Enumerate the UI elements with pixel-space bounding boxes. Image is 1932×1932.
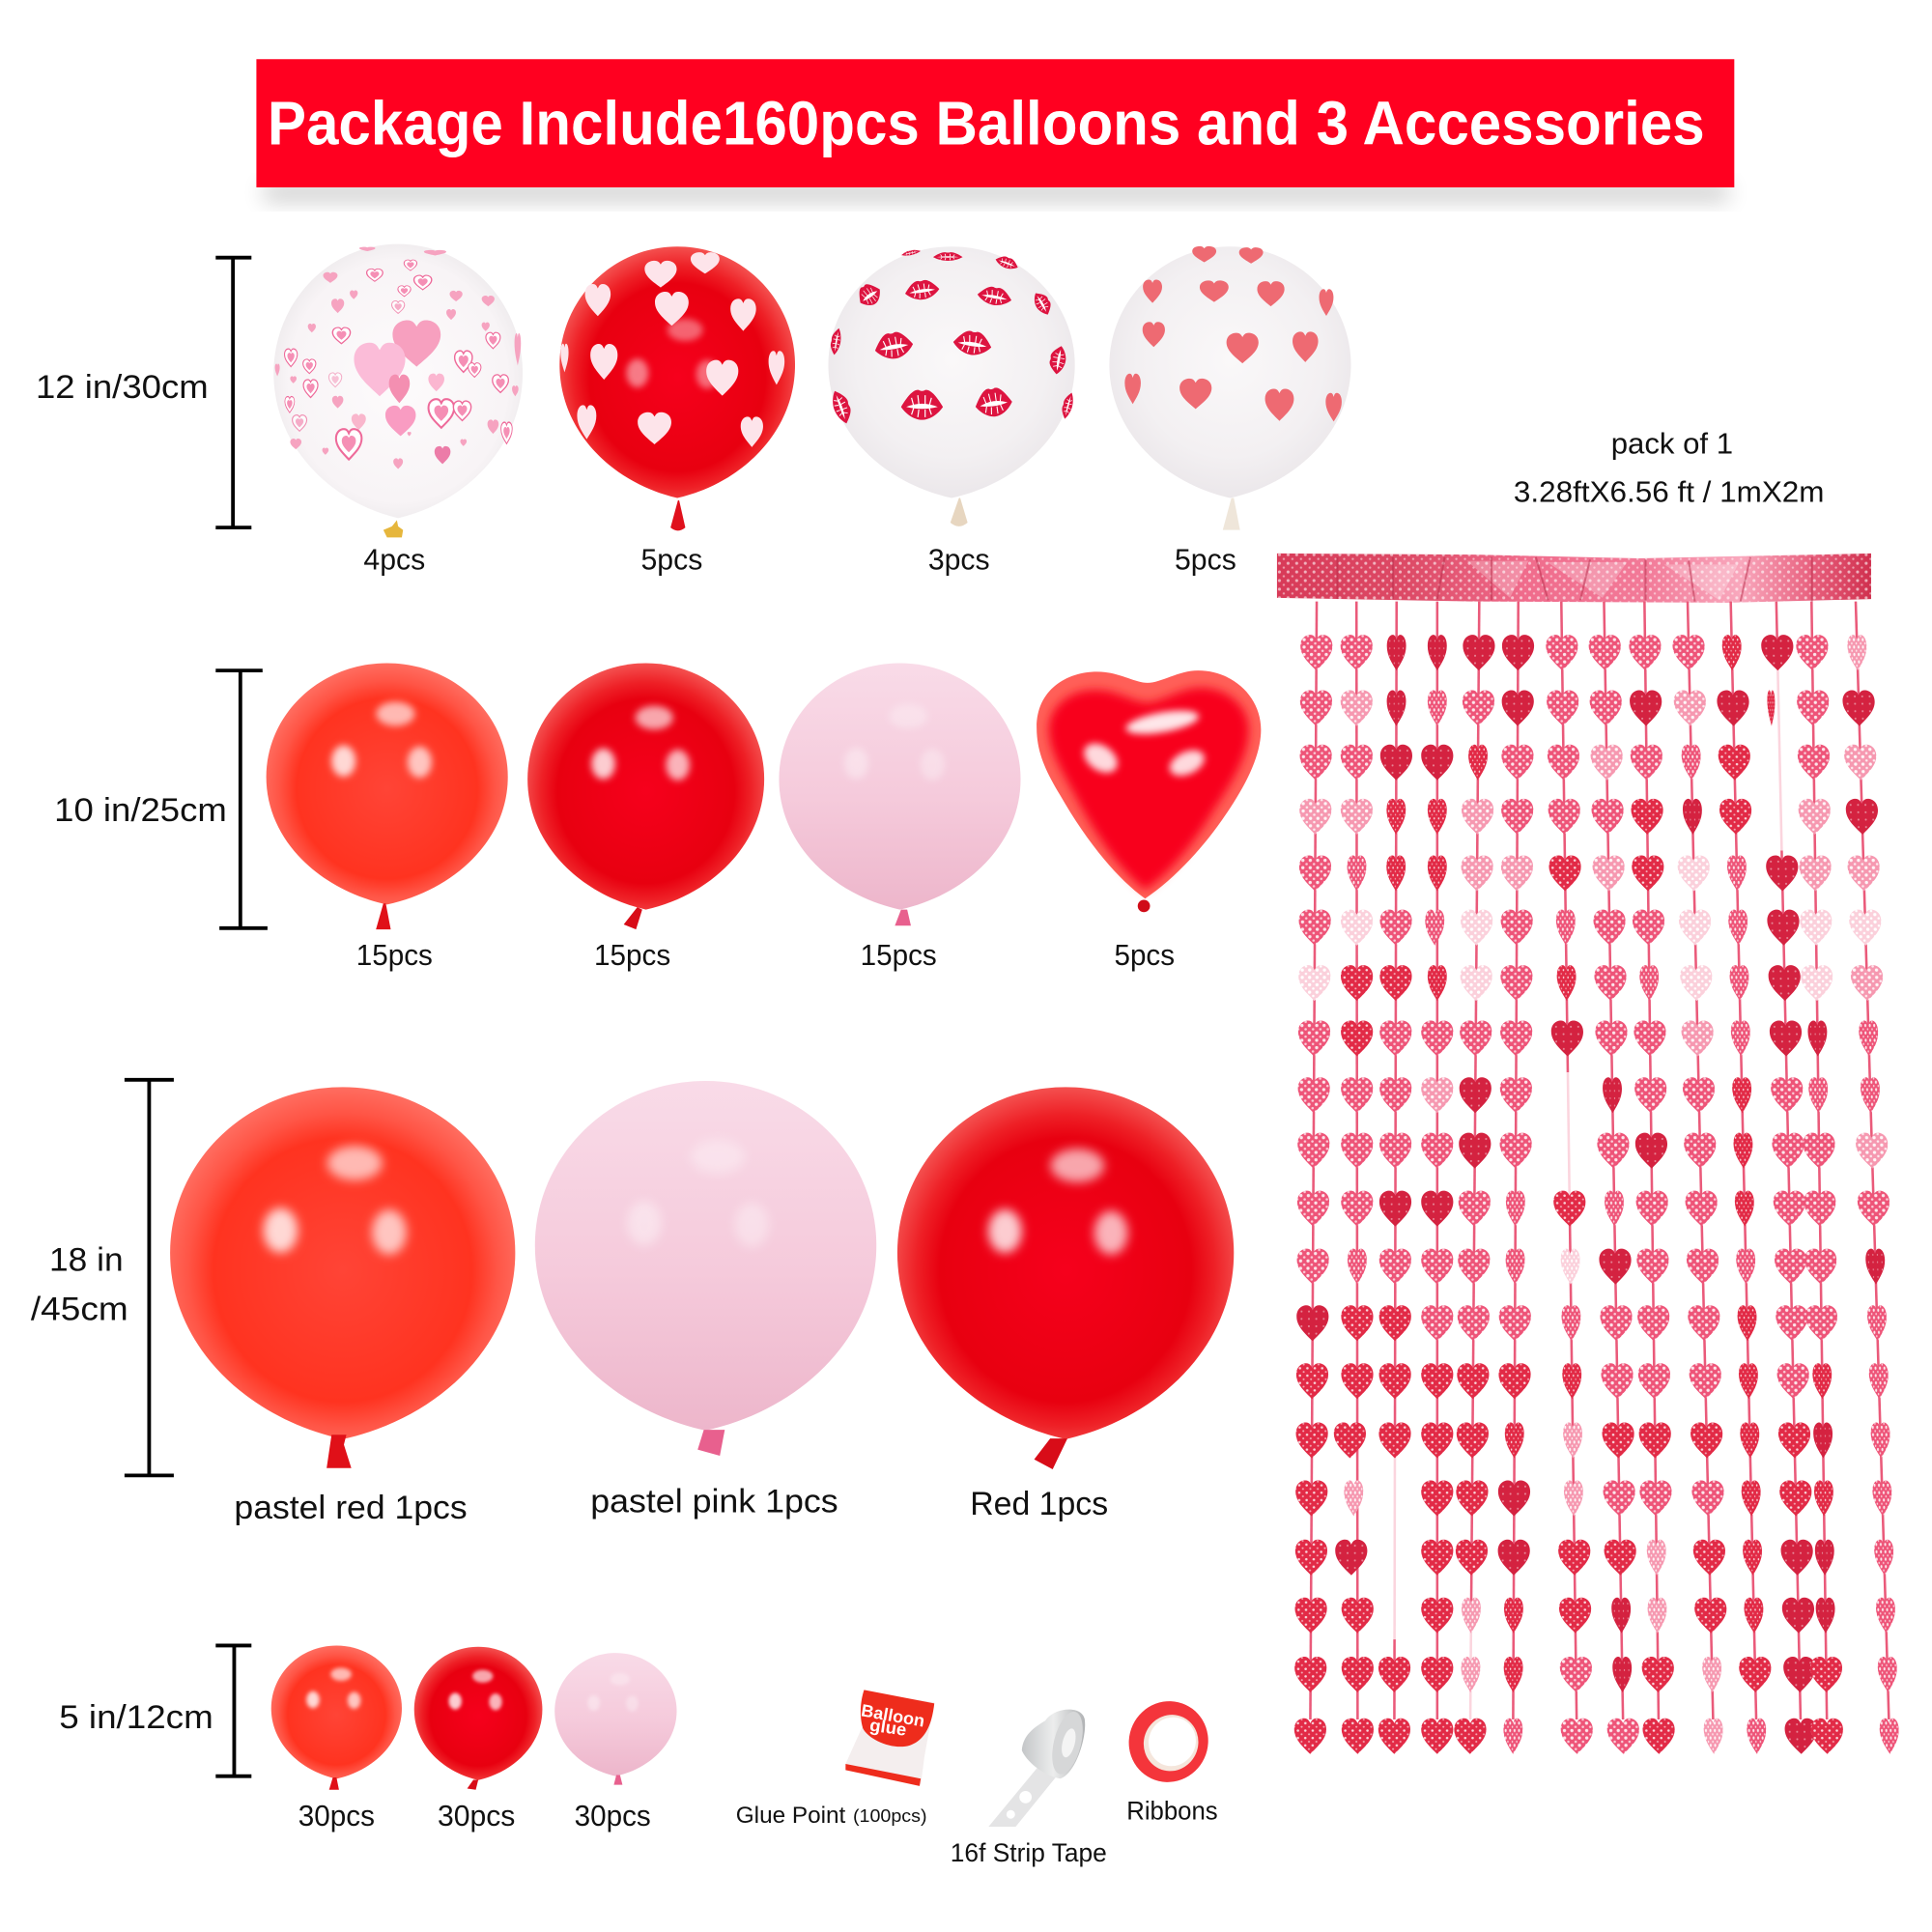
knot (624, 907, 642, 929)
accessory: balloon glue bag: glue (868, 1716, 908, 1740)
curtain strand 4 (1421, 602, 1453, 1754)
curtain strand 13 (1796, 602, 1843, 1754)
quantity labels: 12 in row: 4pcs (363, 544, 425, 577)
quantity labels: 5 in row: 30pcs (575, 1800, 651, 1833)
accessory label: glue point (736, 1803, 927, 1829)
balloon: 10 in pink (779, 663, 1021, 925)
curtain strand 1 (1294, 602, 1333, 1754)
accessory label: ribbons: Ribbons (1126, 1796, 1218, 1825)
size bracket: 18 in (31, 1080, 174, 1475)
curtain strand 6 (1497, 602, 1534, 1754)
quantity labels: 10 in row: 5pcs (1115, 939, 1175, 972)
curtain strand 8 (1588, 602, 1639, 1754)
quantity labels: 18 in row: pastel red 1pcs (234, 1490, 468, 1526)
balloon: clear with pink hearts (273, 244, 523, 537)
balloon: red with white hearts (559, 246, 795, 530)
knot (384, 520, 403, 537)
knot (1138, 899, 1151, 912)
accessory label: strip tape: 16f Strip Tape (951, 1838, 1107, 1867)
size label: 12 in: 12 in/30cm (36, 369, 209, 406)
balloon: 10 in pastel red (267, 663, 508, 929)
accessory: balloon glue bag: Balloon (860, 1700, 926, 1731)
knot (670, 500, 685, 530)
knot (327, 1435, 352, 1468)
accessory: balloon glue bag (845, 1690, 934, 1786)
heart foil curtain (1277, 554, 1906, 1754)
knot (951, 498, 968, 526)
curtain strand 14 (1839, 602, 1906, 1754)
curtain caption: 3.28ftX6.56 ft / 1mX2m (1514, 475, 1824, 508)
quantity labels: 12 in row (363, 544, 1236, 577)
knot (895, 910, 911, 925)
curtain strand 5 (1454, 602, 1495, 1754)
accessory: strip tape roll (988, 1709, 1089, 1827)
knot (697, 1430, 724, 1456)
quantity labels: 12 in row: 5pcs (1175, 544, 1236, 577)
quantity labels: 5 in row: 30pcs (438, 1800, 515, 1833)
accessory: red ribbon roll (1116, 1689, 1221, 1795)
quantity labels: 10 in row (356, 939, 1175, 972)
knot (468, 1780, 478, 1790)
size bracket: 5 in (59, 1645, 251, 1776)
balloon: 18 in pink (535, 1081, 876, 1456)
size bracket: 10 in (54, 670, 268, 928)
curtain strand 10 (1671, 602, 1730, 1754)
quantity labels: 12 in row: 3pcs (928, 544, 990, 577)
quantity labels: 18 in row: Red 1pcs (970, 1486, 1108, 1522)
knot (1035, 1438, 1067, 1469)
size label: 45 cm: /45cm (31, 1292, 128, 1328)
balloon: 5 in pastel red (271, 1645, 402, 1790)
knot (376, 903, 390, 929)
balloon: 18 in pastel red (170, 1087, 515, 1468)
curtain header fringe (1277, 554, 1871, 603)
balloon: 5 in red (414, 1647, 542, 1790)
title text: Package Include160pcs Balloons and 3 Accessories (268, 88, 1705, 157)
balloon: white with lip prints (828, 246, 1076, 526)
balloon: 10 in heart (1037, 670, 1261, 912)
quantity labels: 10 in row: 15pcs (861, 939, 937, 972)
curtain strand 11 (1715, 602, 1773, 1754)
size label: 5 in: 5 in/12cm (59, 1699, 213, 1736)
quantity labels: 5 in row (298, 1800, 651, 1833)
knot (1223, 498, 1240, 530)
size label: 18 in: 18 in (49, 1242, 124, 1279)
quantity labels: 18 in row (234, 1484, 1108, 1526)
balloon: 18 in red (897, 1087, 1234, 1469)
curtain caption (1514, 428, 1824, 508)
quantity labels: 10 in row: 15pcs (356, 939, 433, 972)
quantity labels: 18 in row: pastel pink 1pcs (590, 1484, 838, 1520)
quantity labels: 5 in row: 30pcs (298, 1800, 375, 1833)
balloon: 10 in red (527, 663, 764, 929)
title banner (256, 59, 1734, 200)
curtain strand 9 (1629, 602, 1675, 1754)
curtain strand 3 (1378, 602, 1412, 1754)
knot (329, 1777, 339, 1790)
size label: 10 in: 10 in/25cm (54, 792, 227, 829)
quantity labels: 10 in row: 15pcs (594, 939, 670, 972)
curtain caption: pack of 1 (1611, 428, 1733, 461)
curtain strand 2 (1333, 602, 1374, 1754)
curtain strand 7 (1546, 602, 1593, 1754)
accessory label: glue point: Glue Point (736, 1803, 846, 1829)
knot (613, 1775, 622, 1785)
balloon: white with red hearts (1109, 246, 1350, 530)
balloon: 5 in pink (554, 1653, 677, 1785)
quantity labels: 12 in row: 5pcs (641, 544, 702, 577)
size bracket: 12 in (36, 258, 251, 527)
curtain strand 12 (1760, 602, 1817, 1754)
accessory label: glue point: (100pcs) (853, 1805, 927, 1826)
